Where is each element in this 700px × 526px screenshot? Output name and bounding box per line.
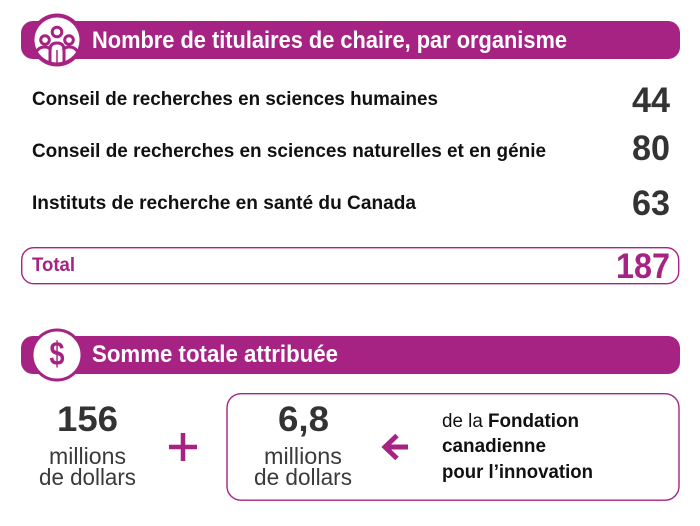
row: sciences naturelles: Conseil de recherches en sciences naturelles et en génie bbox=[32, 140, 546, 162]
row: santé: 63 bbox=[632, 184, 670, 223]
icon: left arrow bbox=[385, 436, 408, 458]
amount: 6,8 millions bbox=[254, 400, 352, 490]
amount: 156 millions: millions bbox=[49, 443, 126, 469]
row: sciences humaines: 44 bbox=[632, 81, 671, 120]
header bar: nombre de titulaires bbox=[21, 21, 680, 59]
heading: nombre de titulaires: Nombre de titulaires de chaire, par organisme bbox=[92, 27, 567, 54]
row: santé bbox=[32, 184, 670, 223]
row: sciences humaines bbox=[32, 81, 671, 120]
row: sciences humaines: Conseil de recherches en sciences humaines bbox=[32, 88, 438, 110]
row: sciences naturelles: 80 bbox=[632, 129, 670, 168]
icon: dollar: $ bbox=[50, 335, 64, 372]
text: source: pour l’innovation bbox=[442, 461, 593, 483]
total row bbox=[22, 247, 679, 286]
text: source: de la Fondation bbox=[442, 410, 579, 432]
amount: 156 millions: de dollars bbox=[39, 464, 136, 490]
icon: group of people bbox=[30, 14, 84, 66]
row: santé: Instituts de recherche en santé du Canada bbox=[32, 192, 416, 214]
amount: 156 millions bbox=[39, 400, 136, 490]
heading: somme totale: Somme totale attribuée bbox=[92, 341, 338, 368]
icon: dollar bbox=[32, 330, 82, 380]
amount: 6,8 millions: 6,8 bbox=[278, 400, 329, 439]
header bar: somme totale bbox=[21, 336, 680, 374]
total row: 187 bbox=[616, 247, 670, 286]
icon: plus bbox=[169, 433, 197, 461]
panel: Fondation canadienne pour l'innovation bbox=[227, 394, 679, 500]
text: source bbox=[442, 410, 593, 483]
total row: Total bbox=[32, 254, 75, 276]
text: source: canadienne bbox=[442, 435, 546, 457]
amount: 6,8 millions: millions bbox=[264, 443, 342, 469]
amount: 156 millions: 156 bbox=[57, 400, 118, 439]
amount: 6,8 millions: de dollars bbox=[254, 464, 352, 490]
row: sciences naturelles bbox=[32, 129, 670, 168]
